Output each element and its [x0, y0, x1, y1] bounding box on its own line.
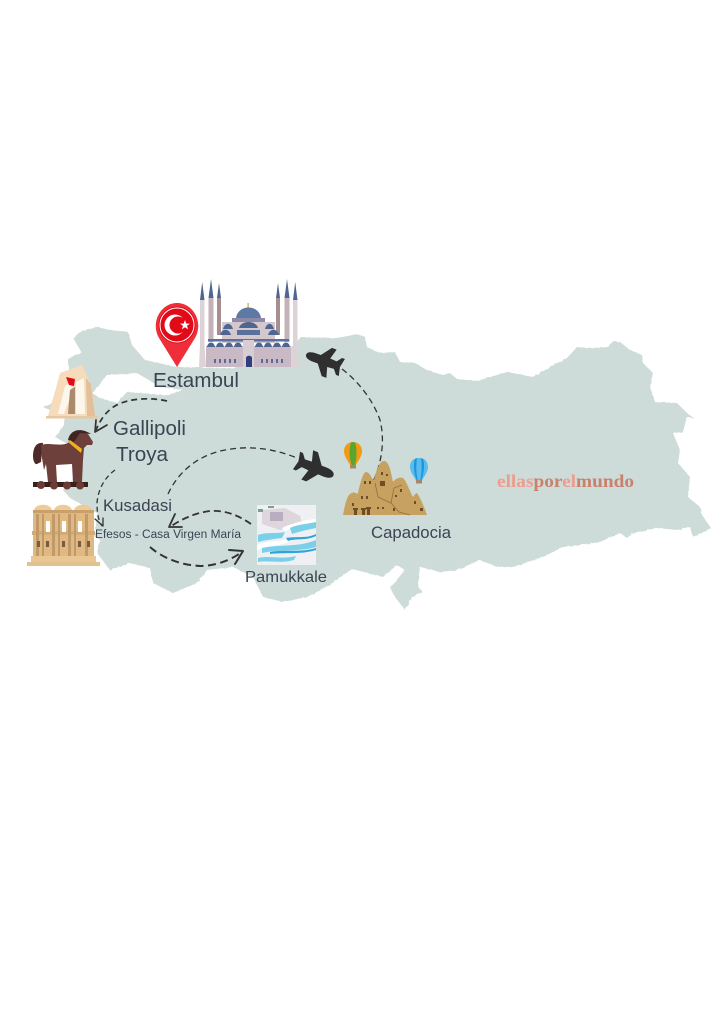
label: Pamukkale: Pamukkale [245, 569, 327, 586]
icon: Library of Celsus [27, 505, 100, 566]
icon: blue balloon [410, 458, 428, 484]
route: Estambul to Gallipoli [95, 399, 167, 432]
logo: ellasporelmundo: ellasporelmundo [497, 471, 634, 491]
route: Pamukkale to Efesos [169, 511, 251, 527]
icon: orange and green balloon [344, 442, 362, 468]
route: Efesos to Pamukkale [150, 547, 243, 566]
label: Troya: Troya [116, 444, 169, 466]
route: Troya to Efesos [95, 470, 115, 526]
icon: Trojan horse [33, 430, 93, 490]
icon: location pin with Turkish flag [156, 303, 198, 367]
label: Estambul: Estambul [153, 370, 239, 392]
label: Kusadasi: Kusadasi [103, 497, 172, 515]
label: Capadocia: Capadocia [371, 524, 452, 542]
map: Turkey silhouette [43, 327, 711, 610]
icon: airplane north [301, 340, 347, 382]
icon: Blue Mosque [199, 279, 299, 367]
icon: Capadocia rock formations [343, 461, 427, 515]
icon: airplane central [291, 446, 339, 490]
icon: Pamukkale terraces [257, 505, 316, 565]
route: Capadocia flight [342, 369, 382, 482]
label: Gallipoli: Gallipoli [113, 418, 186, 440]
route: Kusadasi flight [168, 448, 297, 494]
icon: Gallipoli monument [46, 365, 98, 418]
label: Efesos - Casa Virgen María: Efesos - Casa Virgen María [95, 529, 242, 541]
